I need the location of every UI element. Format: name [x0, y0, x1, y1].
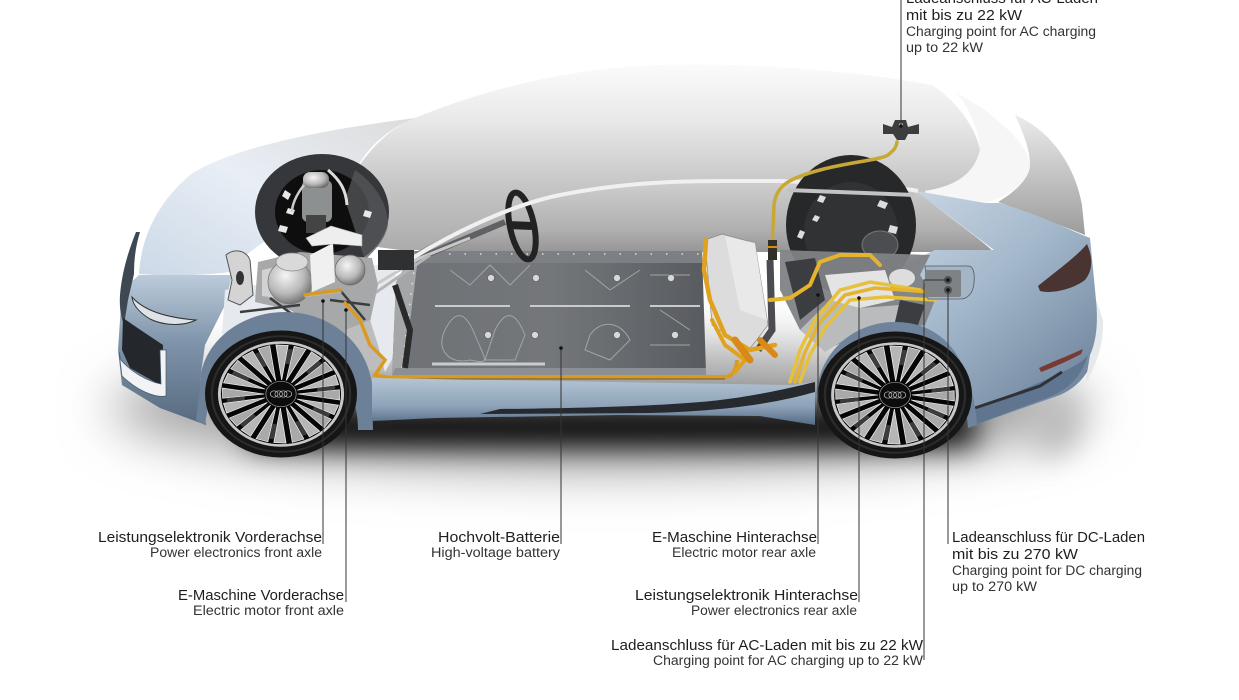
front inner body gap	[222, 262, 400, 372]
rear wheel upper (seen through glass)	[786, 155, 916, 295]
front suspension strut	[292, 170, 347, 233]
car body: translucent roof	[355, 64, 980, 250]
car body: side windows	[400, 181, 994, 262]
label: motor rear: E-Maschine Hinterachse	[652, 529, 817, 546]
DC charging flap	[925, 266, 974, 299]
leader dots	[321, 124, 950, 350]
label: DC charging: up to 270 kW	[952, 579, 1037, 594]
car body: hood	[139, 118, 415, 275]
side sill	[372, 378, 815, 425]
bumper trim	[119, 350, 166, 396]
tail light	[1038, 244, 1091, 292]
label: AC charging bottom: Charging point for AC charging up to 22 kW	[653, 653, 923, 668]
rear reflector	[1039, 349, 1083, 372]
label: motor front: E-Maschine Vorderachse	[178, 587, 344, 604]
front sill and fender	[196, 312, 373, 430]
rear motor assembly	[780, 250, 935, 352]
label: power electronics front: Power electronics front axle	[150, 545, 322, 560]
orange high voltage cables rear	[704, 240, 935, 382]
car body: rear window	[998, 115, 1085, 235]
ground shadow	[110, 346, 1090, 470]
high voltage cable along battery	[392, 360, 737, 379]
steering column	[300, 222, 505, 345]
label: AC charging top	[906, 0, 1098, 55]
car body: rear quarter panel	[825, 191, 1101, 425]
label: motor front	[178, 587, 344, 618]
label: DC charging: Ladeanschluss für DC-Laden	[952, 529, 1145, 546]
grille	[122, 318, 163, 386]
label: motor rear: Electric motor rear axle	[672, 545, 816, 560]
label: power electronics rear: Leistungselektronik Hinterachse	[635, 587, 858, 604]
front wheel	[205, 330, 357, 458]
front dark edge	[120, 232, 140, 325]
label: power electronics rear	[635, 587, 858, 618]
steering wheel	[503, 190, 541, 262]
AC charging socket	[883, 120, 919, 140]
label: AC charging bottom	[611, 637, 924, 668]
rear bumper dark line	[975, 372, 1062, 408]
label: power electronics rear: Power electronics rear axle	[691, 603, 857, 618]
battery pack	[392, 251, 706, 376]
leader lines	[323, 0, 948, 660]
beltline highlight	[395, 181, 918, 270]
rear trim	[1085, 300, 1103, 385]
rear power electronics box	[705, 234, 772, 355]
label: battery: Hochvolt-Batterie	[438, 529, 560, 546]
label: DC charging: mit bis zu 270 kW	[952, 546, 1079, 563]
AC charging cable	[768, 142, 897, 260]
sill dark strip	[480, 382, 815, 414]
label: DC charging	[952, 529, 1145, 594]
label: AC charging top: Charging point for AC charging	[906, 24, 1096, 39]
label: motor front: Electric motor front axle	[193, 603, 344, 618]
rear bumper lower	[975, 355, 1088, 425]
rear wheel	[818, 332, 972, 458]
label: power electronics front	[98, 529, 322, 560]
front wheel upper (seen through hood)	[255, 154, 389, 270]
label: AC charging top: up to 22 kW	[906, 40, 983, 55]
car body: front fascia	[118, 275, 232, 425]
label: DC charging: Charging point for DC charging	[952, 563, 1142, 578]
high voltage cables front	[305, 290, 392, 378]
headlight	[132, 297, 196, 324]
label: power electronics front: Leistungselektronik Vorderachse	[98, 529, 322, 546]
label: AC charging bottom: Ladeanschluss für AC-Laden mit bis zu 22 kW	[611, 637, 924, 654]
label: battery	[431, 529, 560, 560]
front electric motor and power electronics	[226, 226, 414, 372]
label: motor rear	[652, 529, 817, 560]
label: AC charging top: mit bis zu 22 kW	[906, 7, 1023, 24]
rear fender arch	[816, 322, 977, 428]
label: battery: High-voltage battery	[431, 545, 560, 560]
car body: white C-pillar	[925, 92, 1030, 203]
